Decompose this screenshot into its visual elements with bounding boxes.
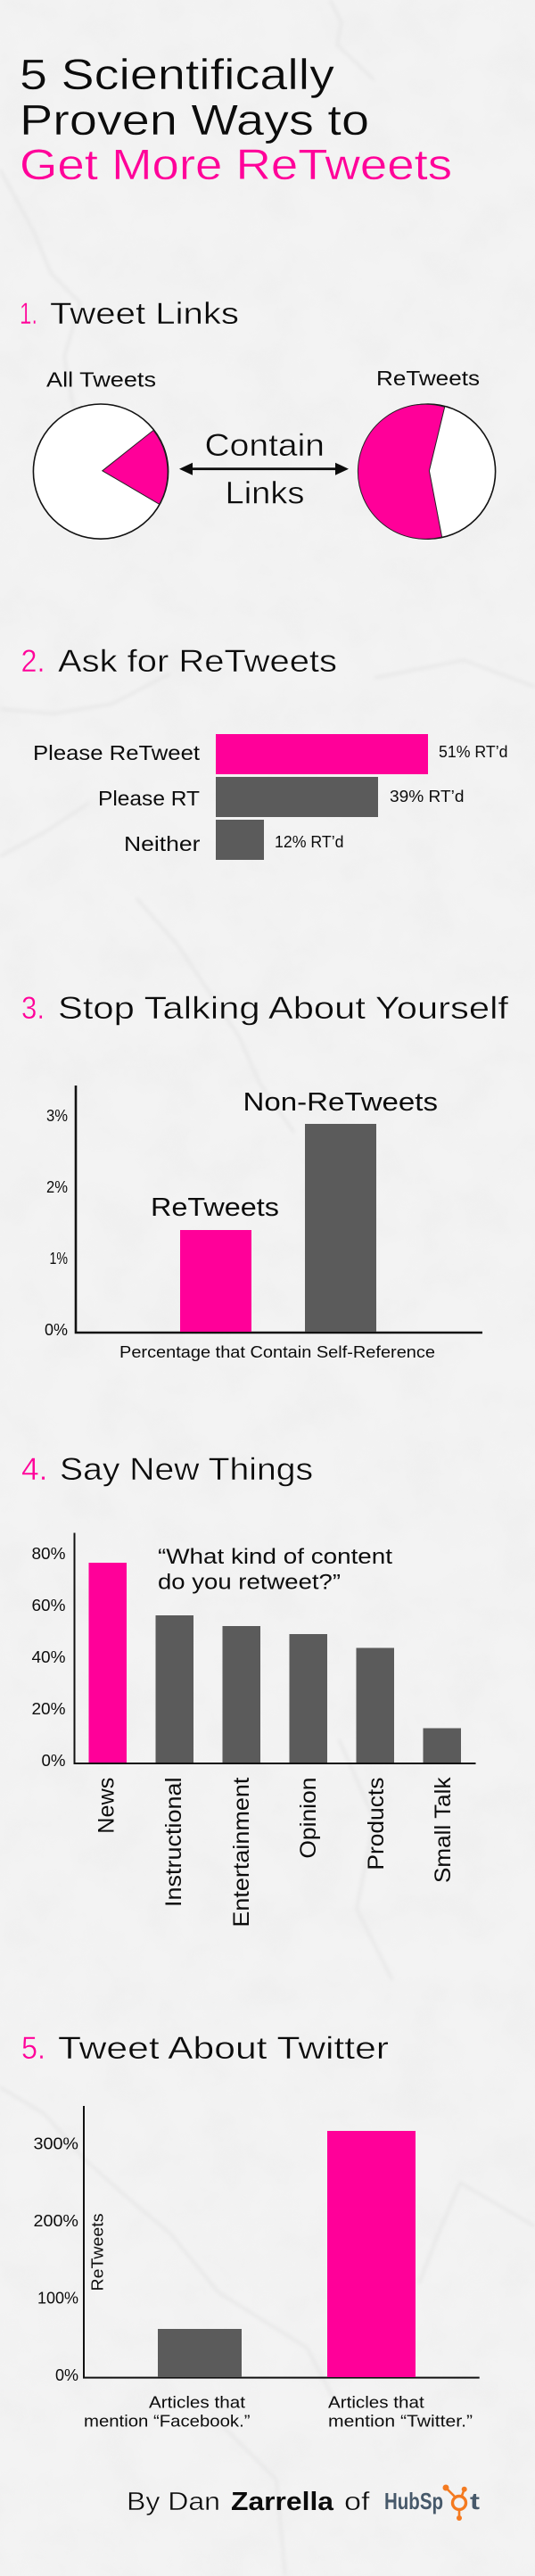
y axis labels: 2% (46, 1178, 68, 1196)
label: facebook: mention “Facebook.” (84, 2412, 250, 2431)
bar: products (357, 1648, 394, 1763)
y axis labels: 1% (50, 1250, 68, 1267)
survey question (158, 1545, 392, 1595)
bar: instructional (155, 1615, 193, 1763)
row: neither: 12% RT’d (275, 832, 344, 851)
title: Get More ReTweets (20, 142, 452, 189)
bar: facebook (158, 2329, 242, 2377)
row: neither (124, 820, 344, 860)
title: 5 Scientifically (20, 52, 334, 99)
heading: ask for retweets: Ask for ReTweets (58, 644, 337, 679)
panel: 5. tweet about twitter (21, 2031, 480, 2431)
rotated category labels: Small Talk (431, 1777, 456, 1883)
pie chart: all tweets (33, 404, 169, 539)
pie label: retweets: ReTweets (376, 367, 480, 390)
bar label: non-retweets: Non-ReTweets (243, 1088, 438, 1117)
y axis labels: 20% (32, 1699, 66, 1718)
label: contain: Contain (205, 428, 325, 463)
heading: ask for retweets: 2. (21, 644, 45, 679)
y axis labels: 0% (55, 2366, 78, 2384)
label: twitter: Articles that (328, 2392, 424, 2412)
y axis labels (32, 1544, 66, 1770)
bar: opinion (289, 1634, 327, 1763)
row: please rt: 39% RT’d (390, 787, 464, 805)
panel: 2. ask for retweets (21, 644, 508, 860)
rotated category labels: Opinion (296, 1778, 321, 1859)
double arrow (179, 463, 349, 475)
credit: by dan zarrella of: of (344, 2488, 371, 2516)
panel: 3. stop talking about yourself (21, 991, 508, 1361)
rotated category labels: Instructional (161, 1777, 186, 1907)
label: links: Links (225, 476, 305, 510)
rotated category labels: News (94, 1778, 119, 1834)
heading: tweet about twitter: Tweet About Twitter (58, 2031, 389, 2066)
label: facebook (84, 2392, 250, 2431)
y axis labels (45, 1107, 68, 1339)
logo: hubspot (384, 2485, 480, 2521)
heading: say new things: 4. (21, 1452, 48, 1487)
rotated category labels (94, 1777, 456, 1928)
axis lines (75, 1532, 476, 1763)
heading: stop talking about yourself: Stop Talking About Yourself (58, 991, 508, 1026)
row: please retweet: 51% RT’d (439, 742, 508, 761)
y axis labels: 100% (37, 2290, 78, 2308)
bar chart: self-reference (45, 1086, 482, 1361)
credit: by dan zarrella of: By Dan (127, 2488, 220, 2516)
credit: by dan zarrella of: Zarrella (231, 2488, 334, 2516)
row: please retweet (33, 734, 508, 774)
row: please rt (98, 777, 464, 817)
rotated category labels: Entertainment (229, 1778, 254, 1928)
label: twitter (328, 2392, 473, 2431)
axis lines (76, 1086, 482, 1333)
panel: 1. tweet links (20, 297, 496, 539)
y axis labels: 80% (32, 1544, 66, 1563)
bar chart: content types (32, 1532, 476, 1928)
y axis labels: 0% (45, 1321, 68, 1339)
bar: twitter (327, 2131, 416, 2377)
heading: stop talking about yourself: 3. (21, 991, 45, 1026)
bar chart: facebook vs twitter (34, 2106, 480, 2431)
bar: non-retweets (305, 1124, 376, 1332)
y axis labels: 3% (46, 1107, 68, 1125)
y axis labels: 0% (41, 1751, 66, 1770)
survey question: “What kind of content (158, 1545, 392, 1569)
logo: hubspot: t (470, 2488, 480, 2514)
y axis labels: 60% (32, 1596, 66, 1614)
bar: retweets (180, 1230, 251, 1332)
heading: tweet links: Tweet Links (50, 297, 239, 331)
y axis title: ReTweets (89, 2214, 107, 2291)
row: please rt: Please RT (98, 787, 200, 810)
bar: news (89, 1563, 127, 1763)
bar label: retweets: ReTweets (151, 1193, 279, 1222)
y axis labels: 200% (34, 2212, 78, 2230)
pie chart: retweets (358, 404, 496, 539)
pie label: all tweets: All Tweets (46, 367, 156, 391)
logo: hubspot: HubSp (384, 2488, 443, 2514)
heading: tweet about twitter: 5. (21, 2031, 45, 2066)
row: please retweet: Please ReTweet (33, 741, 201, 764)
x axis caption: Percentage that Contain Self-Reference (119, 1342, 435, 1361)
credit: by dan zarrella of (127, 2488, 371, 2516)
rotated category labels: Products (364, 1778, 389, 1870)
bar: small talk (423, 1729, 461, 1763)
axis lines (84, 2106, 480, 2378)
label: twitter: mention “Twitter.” (328, 2412, 473, 2431)
label: facebook: Articles that (149, 2392, 245, 2412)
title: Proven Ways to (20, 97, 369, 144)
heading: say new things: Say New Things (60, 1452, 313, 1487)
y axis labels: 300% (34, 2134, 78, 2152)
y axis labels (34, 2134, 78, 2384)
heading: tweet links: 1. (20, 297, 37, 331)
title (20, 52, 452, 189)
row: neither: Neither (124, 832, 201, 855)
y axis labels: 40% (32, 1647, 66, 1666)
survey question: do you retweet?” (158, 1571, 341, 1595)
panel: 4. say new things (21, 1452, 476, 1928)
bar: entertainment (223, 1626, 260, 1763)
